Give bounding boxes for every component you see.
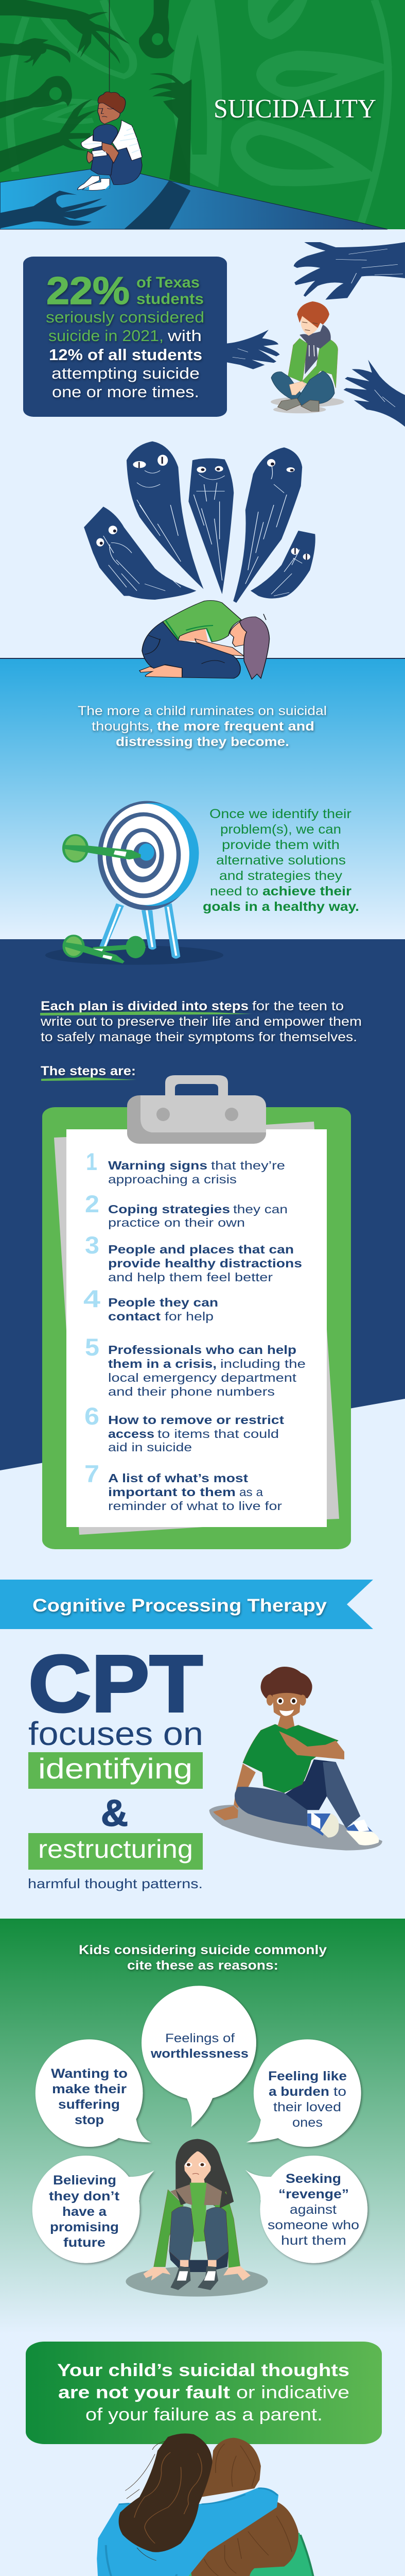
step 4: 4: [83, 1285, 100, 1312]
bubble: suffering: stop: [75, 2113, 104, 2127]
step 1: 1: [86, 1148, 97, 1175]
blue floor gradient: [0, 658, 405, 939]
bubble: promising future: have a: [62, 2205, 107, 2219]
bubble: promising future: they don’t: [49, 2189, 120, 2204]
steps intro text: Each plan is divided into steps: [41, 999, 249, 1013]
stat box: [23, 257, 227, 417]
banner: cognitive processing therapy: [0, 1580, 373, 1629]
step 1: Warning signs: [108, 1159, 207, 1172]
stat text: with: [167, 327, 202, 345]
steps intro text: The steps are:: [41, 1064, 136, 1078]
floor: [0, 169, 388, 229]
step 1: approaching a crisis: [108, 1173, 237, 1186]
stat text: seriously considered: [46, 308, 204, 326]
ghost scratches and faces: [96, 455, 310, 596]
callout: not your fault: are not your fault: [58, 2383, 230, 2402]
steps intro text: [40, 999, 362, 1081]
intrusive thought ghosts: [84, 442, 315, 603]
goals text: alternative solutions: [216, 853, 346, 868]
steps intro text: write out to preserve their life and empower them: [40, 1014, 362, 1029]
target shadow: [45, 945, 223, 965]
step 5: [85, 1333, 306, 1398]
shadow hands: [0, 0, 191, 185]
step 7: A list of what’s most: [108, 1471, 248, 1485]
step 2: they can: [233, 1202, 288, 1216]
bubble: burden: to: [333, 2084, 346, 2099]
back sheet: [54, 1122, 339, 1535]
goals text: need to: [210, 884, 258, 899]
step 2: Coping strategies: [108, 1202, 230, 1216]
panel: statistics: [23, 242, 405, 427]
clip: [127, 1075, 266, 1144]
sad boy figure: [78, 92, 142, 190]
clipboard board: [42, 1107, 351, 1549]
panel: ghosts and curled girl: [0, 442, 405, 939]
bubble: suffering: Wanting to: [51, 2066, 128, 2081]
step 7: important to them: [108, 1485, 236, 1499]
stat text: of Texas: [136, 274, 200, 291]
step 7: [84, 1460, 282, 1513]
stat text: 12% of all students: [49, 346, 202, 364]
fallen darts: [63, 936, 146, 963]
steps intro text: for the teen to: [252, 999, 344, 1013]
step 6: access: [108, 1427, 154, 1440]
goals text: provide them with: [222, 838, 340, 852]
bubble: revenge: against: [290, 2202, 337, 2217]
panel: hugging friends: [0, 2433, 405, 2576]
step 3: [85, 1231, 302, 1284]
bubble: suffering: [51, 2066, 128, 2127]
step 1: that they’re: [211, 1159, 285, 1172]
step 7: 7: [84, 1460, 99, 1487]
bubble: worthlessness: Feelings of: [165, 2031, 235, 2045]
identifying tag: identifying: [38, 1752, 192, 1785]
paper: [66, 1129, 327, 1527]
goals text: achieve their: [262, 884, 351, 899]
green gradient backdrop: [0, 1919, 405, 2334]
step 3: People and places that can: [108, 1243, 294, 1256]
callout: not your fault: or indicative: [236, 2383, 349, 2402]
step 5: Professionals who can help: [108, 1343, 296, 1357]
rumination text: distressing they become.: [116, 735, 289, 749]
sad girl sitting: [126, 2139, 268, 2297]
step 5: 5: [85, 1333, 99, 1361]
bubble: worthlessness: worthlessness: [150, 2047, 249, 2061]
step 2: 2: [85, 1190, 99, 1217]
rumination text: [78, 704, 327, 749]
bubble: revenge: “revenge”: [278, 2187, 349, 2201]
restructuring tag: restructuring: [38, 1835, 193, 1863]
bubble: promising future: future: [63, 2235, 105, 2250]
step 2: practice on their own: [108, 1216, 245, 1229]
panel: clipboard: [42, 1075, 351, 1549]
reasons heading: [79, 1943, 327, 1973]
step 6: [84, 1402, 284, 1454]
goals text: goals in a healthy way.: [203, 900, 359, 914]
target legs: [99, 903, 180, 959]
bubble: burden: their loved: [273, 2100, 341, 2114]
stat text: attempting suicide: [51, 364, 200, 382]
goals text: [203, 807, 359, 914]
step 6: 6: [84, 1402, 99, 1430]
bubble: promising future: Believing: [53, 2173, 116, 2188]
title: SUICIDALITY: [214, 94, 376, 124]
hands and boy illustration: [227, 242, 405, 427]
target face: [98, 801, 199, 910]
stat text: 22%: [46, 269, 130, 312]
goals text: Once we identify their: [209, 807, 351, 821]
focuses on: focuses on: [28, 1715, 203, 1752]
step 6: aid in suicide: [108, 1440, 192, 1454]
step 1: [86, 1148, 285, 1186]
dart in target: [63, 835, 141, 862]
step 3: and help them feel better: [108, 1270, 273, 1284]
callout: not your fault: [26, 2342, 382, 2444]
panel: target and goals: [45, 801, 359, 965]
step 6: to items that could: [157, 1427, 279, 1440]
panel: navy steps background: [0, 939, 405, 1470]
goals text: problem(s), we can: [220, 822, 341, 837]
bubble: worthlessness: [150, 2031, 249, 2061]
speech bubbles: [32, 1986, 367, 2263]
goals text: and strategies they: [219, 869, 343, 883]
floor shadows: [0, 180, 190, 229]
floor line: [0, 658, 405, 659]
hero illustration: [0, 0, 393, 229]
reasons heading: Kids considering suicide commonly: [79, 1943, 327, 1957]
stat text: suicide in 2021,: [48, 327, 164, 345]
bubble: suffering: make their: [52, 2082, 127, 2096]
step 4: contact: [108, 1310, 161, 1323]
reasons heading: cite these as reasons:: [127, 1958, 278, 1973]
logo watermark: [10, 0, 393, 229]
rumination text: thoughts,: [92, 719, 153, 734]
bubble: burden: ones: [292, 2115, 323, 2130]
grabbing hands: [227, 242, 405, 427]
step 2: [85, 1190, 288, 1229]
bubble: burden: Feeling like: [268, 2069, 347, 2083]
panel: hero: [0, 0, 405, 229]
stat text: students: [136, 291, 204, 308]
bubble: promising future: [49, 2173, 120, 2250]
step 5: local emergency department: [108, 1371, 297, 1384]
step 6: How to remove or restrict: [108, 1413, 284, 1427]
bubble: revenge: hurt them: [281, 2233, 346, 2248]
steps intro text: to safely manage their symptoms for themselves.: [41, 1030, 357, 1044]
stat text: [46, 269, 204, 401]
curled up girl: [139, 601, 269, 679]
step 7: reminder of what to live for: [108, 1499, 282, 1513]
corner line: [109, 0, 110, 92]
identifying tag: [28, 1752, 203, 1789]
step 4: for help: [165, 1310, 214, 1323]
CPT heading: CPT: [28, 1639, 203, 1729]
bubble: promising future: promising: [50, 2220, 119, 2234]
panel: CPT explanation: [28, 1639, 382, 1891]
bubble: revenge: someone who: [268, 2218, 359, 2232]
restructuring tag: [28, 1833, 203, 1870]
ampersand: &: [101, 1793, 128, 1834]
rumination text: The more a child ruminates on suicidal: [78, 704, 327, 718]
target illustration: [45, 801, 223, 965]
two girls hugging: [91, 2433, 315, 2576]
step 3: 3: [85, 1231, 99, 1259]
step 7: as a: [239, 1485, 263, 1499]
bubble: burden: a burden: [269, 2084, 329, 2099]
step 3: provide healthy distractions: [108, 1257, 302, 1270]
bubble: revenge: Seeking: [286, 2172, 341, 2186]
stat text: one or more times.: [52, 383, 199, 401]
bubble: suffering: suffering: [58, 2097, 120, 2112]
step 4: [83, 1285, 218, 1323]
smiling boy pointing: [209, 1667, 382, 1851]
step 5: and their phone numbers: [108, 1385, 275, 1398]
step 5: including the: [220, 1357, 306, 1370]
bubble: burden: [268, 2069, 347, 2130]
harmful thought patterns: harmful thought patterns.: [28, 1876, 203, 1891]
step 4: People they can: [108, 1296, 218, 1309]
banner: cognitive processing therapy: Cognitive Processing Therapy: [32, 1596, 327, 1616]
rumination text: the more frequent and: [157, 719, 314, 734]
callout: not your fault: Your child’s suicidal thoughts: [57, 2361, 349, 2380]
boy in green jacket: [271, 301, 344, 413]
bubble: revenge: [268, 2172, 359, 2248]
callout: not your fault: of your failure as a parent.: [85, 2405, 323, 2425]
panel: reasons: [0, 1919, 405, 2334]
step 5: them in a crisis,: [108, 1357, 217, 1370]
